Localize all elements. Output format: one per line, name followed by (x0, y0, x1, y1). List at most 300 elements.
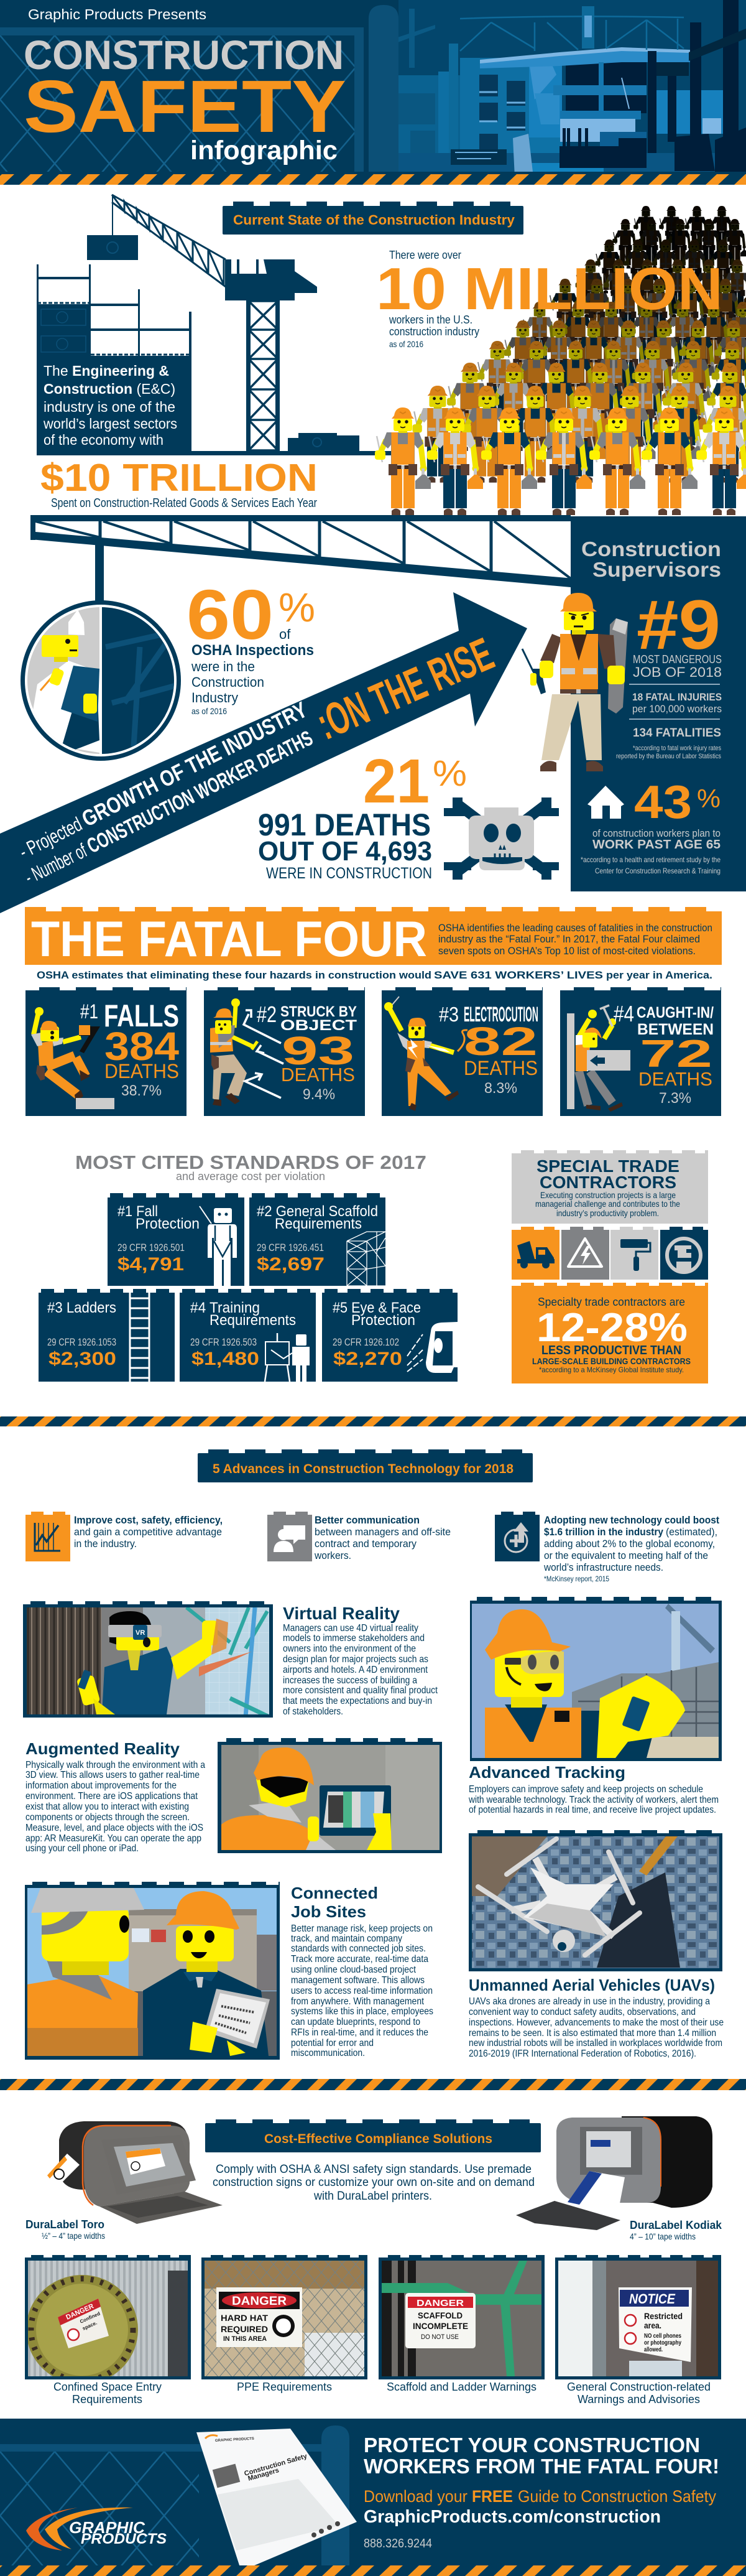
text: fatalities: 134 FATALITIES (633, 727, 721, 740)
stat: 60 percent: of (279, 626, 291, 642)
heading: supervisors: Supervisors (592, 558, 721, 581)
benefit: better communication: workers. (314, 1550, 351, 1561)
text: fatal four description (438, 922, 712, 957)
standard 5: eye protection: $2,270 (333, 1349, 402, 1369)
text: connected job sites: miscommunication. (291, 2048, 365, 2058)
electrocution stats: DEATHS (464, 1057, 538, 1079)
header pre-title: Graphic Products Presents (28, 6, 206, 22)
photo: general warnings: NOTICE (629, 2291, 676, 2307)
stat: ten million workers (376, 249, 723, 349)
text: uavs: convenient way to conduct safety audits, observations, and (469, 2007, 696, 2017)
stat: 21 percent deaths: % (433, 753, 467, 794)
text: engineering and construction: Construction (E&C) (44, 381, 175, 397)
photo: scaffold warnings: INCOMPLETE (413, 2321, 468, 2331)
footer heading: PROTECT YOUR CONSTRUCTION (364, 2434, 700, 2457)
struck stats: STRUCK BY (280, 1003, 357, 1020)
photo: confined space: DANGER (65, 2302, 95, 2322)
standard 1: fall protection: $4,791 (117, 1254, 184, 1275)
photo captions: Requirements (72, 2393, 142, 2406)
arrow text: worker deaths (21, 726, 316, 889)
struck stats: 93 (282, 1028, 354, 1073)
arrow text: worker deaths: - Number of (21, 839, 90, 888)
text: advanced tracking (468, 1763, 719, 1815)
icon: plus and arrow (505, 1522, 528, 1552)
caught stats: BETWEEN (637, 1021, 714, 1038)
caught stats (614, 1001, 714, 1107)
photo: scaffold warnings: DO NOT USE (421, 2333, 459, 2341)
benefit: adopting new technology (495, 1513, 719, 1583)
standard 3: ladders: $2,300 (48, 1349, 116, 1369)
panel: special trade contractors: CONTRACTORS (540, 1173, 676, 1192)
icon: water tap (667, 1239, 701, 1272)
photo: scaffold warnings: DANGER (417, 2298, 464, 2309)
stat: ten million workers: There were over (389, 249, 461, 261)
struck stats: #2 (257, 1002, 277, 1027)
text: save 631 workers: per year in America. (606, 969, 712, 981)
standard 1: fall protection: Protection (136, 1216, 200, 1232)
stat: 43 percent: 43 (634, 776, 692, 828)
footer download line: Guide to Construction Safety (518, 2487, 716, 2506)
text: advanced tracking: Employers can improve safety and keep projects on schedule (469, 1784, 703, 1795)
footer heading: WORKERS FROM THE FATAL FOUR! (364, 2455, 719, 2478)
caught stats: CAUGHT-IN/ (637, 1004, 714, 1021)
text: augmented reality: environment. There are iOS applications that (25, 1791, 198, 1802)
icon: ladder (130, 1293, 149, 1382)
hazard stripe top (0, 172, 746, 185)
standard 1: fall protection (108, 1196, 244, 1286)
crane cab (225, 259, 317, 300)
text: engineering and construction: industry is one of the (44, 399, 175, 415)
text: connected job sites: from anywhere. With management (291, 1996, 424, 2007)
panel: construction supervisors (571, 516, 746, 891)
stat: 43 percent: Center for Construction Research & Training (595, 867, 721, 875)
stat: 21 percent deaths (258, 746, 467, 882)
struck stats: OBJECT (280, 1017, 357, 1034)
supervisor figure (522, 593, 628, 771)
stat: 60 percent (186, 575, 315, 716)
printer: duralabel kodiak (516, 2116, 712, 2230)
text: fatal injuries: per 100,000 workers (632, 703, 722, 715)
text: virtual reality: that meets the expectations and buy-in (283, 1696, 432, 1706)
photo: general warnings: NO cell phones (644, 2333, 681, 2340)
money bricks (41, 309, 86, 352)
rising arrow (0, 592, 527, 913)
banner: compliance solutions: Cost-Effective Compliance Solutions (264, 2132, 492, 2146)
text: comply: construction signs or customize your own on-site and on demand (213, 2176, 535, 2189)
standard 2: scaffold: #2 General Scaffold (257, 1203, 378, 1220)
falls stats: DEATHS (104, 1060, 179, 1082)
panel: special trade contractors: managerial challenge and contributes to the (535, 1199, 680, 1209)
stat: 21 percent deaths: 991 DEATHS (258, 807, 431, 842)
struck stats: 9.4% (303, 1086, 335, 1103)
text: save 631 workers (37, 969, 712, 981)
benefit: adopting new technology: or the equivalent to meeting half of the (544, 1550, 708, 1561)
caption: toro: ½” – 4” tape widths (42, 2231, 105, 2241)
booklet: Construction Safety (244, 2452, 308, 2478)
footnote: labor statistics: *according to fatal work injury rates (633, 745, 721, 752)
standard 4: training (180, 1291, 316, 1382)
photo: ppe requirements: DANGER (232, 2295, 287, 2308)
panel: special trade contractors: Executing construction projects is a large (540, 1190, 676, 1200)
hazard stripe bottom (0, 2565, 746, 2576)
electrocution stats: 82 (464, 1019, 538, 1064)
text: save 631 workers: SAVE 631 WORKERS’ LIVES (434, 969, 603, 981)
icon: skull and crossbones (444, 797, 559, 880)
stat: 60 percent: Construction (191, 674, 264, 690)
standard 4: training: Requirements (210, 1312, 296, 1329)
text: comply: Comply with OSHA & ANSI safety sign standards. Use premade (216, 2163, 532, 2176)
icon: face shield (407, 1322, 458, 1373)
heading: supervisors: Construction (581, 537, 721, 560)
panel: the fatal four (25, 909, 722, 967)
text: connected job sites: management software. This allows (291, 1975, 425, 1986)
text: fatal four description: industry as the “Fatal Four.” In 2017, the Fatal Four claimed (438, 933, 700, 945)
card: caught in between (560, 989, 721, 1116)
icon: trainer and easel (265, 1333, 310, 1382)
electrocution stats: 8.3% (484, 1080, 517, 1097)
text: most dangerous: JOB OF 2018 (633, 664, 722, 680)
photo captions: Confined Space Entry (53, 2381, 162, 2393)
benefit: better communication: between managers and off-site (315, 1526, 451, 1538)
icon: rising chart (35, 1523, 60, 1551)
text: fatal injuries (632, 691, 722, 715)
standard 3: ladders: #3 Ladders (47, 1300, 116, 1316)
photo captions: PPE Requirements (237, 2381, 332, 2393)
stat: 21 percent deaths: 21 (363, 746, 430, 816)
standard 5: eye protection: Protection (351, 1312, 415, 1329)
text: virtual reality: of stakeholders. (283, 1706, 343, 1717)
text: uavs: 2016-2019 (IFR International Federation of Robotics, 2016). (469, 2048, 696, 2059)
stat: 43 percent: of construction workers plan to (592, 827, 721, 839)
booklet: Managers (247, 2467, 280, 2483)
icon: scaffold (347, 1232, 385, 1286)
banner: current state (223, 204, 523, 235)
post (567, 1013, 574, 1109)
photo: ppe requirements (201, 2256, 367, 2379)
benefit: cost safety efficiency (25, 1513, 223, 1561)
text: most dangerous (633, 653, 722, 680)
arrow text: worker deaths: CONSTRUCTION WORKER DEATHS (83, 726, 316, 858)
banner: tech advances (198, 1451, 533, 1482)
text: augmented reality: app: AR MeasureKit. You can operate the app (25, 1833, 201, 1844)
text: augmented reality (25, 1739, 205, 1854)
caption: toro (25, 2218, 105, 2241)
truss beam (30, 515, 571, 602)
text: virtual reality: airports and hotels. A 4D environment (283, 1665, 428, 1675)
falling worker (31, 1007, 100, 1102)
text: save 631 workers: OSHA estimates that eliminating these four hazards in construction would (37, 969, 431, 981)
crane tower (246, 300, 280, 452)
benefit: adopting new technology: *McKinsey report, 2015 (544, 1574, 609, 1583)
heading: most cited standards (75, 1151, 426, 1183)
image: virtual reality: VR (136, 1629, 145, 1637)
text: uavs: UAVs aka drones are already in use in the industry, providing a (469, 1996, 710, 2007)
text: engineering and construction: The Engineering & (44, 363, 169, 379)
falls stats: 38.7% (121, 1082, 162, 1099)
photo captions: General Construction-related (567, 2381, 711, 2393)
text: augmented reality: Physically walk through the environment with a (25, 1760, 205, 1770)
panel: productivity stat: *according to a McKinsey Global Institute study. (539, 1365, 684, 1374)
photo: confined space: space. (81, 2320, 98, 2332)
panel: productivity stat: 12-28% (536, 1304, 688, 1350)
benefit: cost safety efficiency: Improve cost, safety, efficiency, (74, 1514, 223, 1526)
electrocution stats (439, 1003, 538, 1097)
benefit: better communication: contract and temporary (315, 1538, 417, 1550)
banner: compliance solutions (205, 2121, 541, 2152)
panel: special trade contractors: SPECIAL TRADE (536, 1156, 679, 1176)
hazard stripe lower (0, 2079, 746, 2090)
standard 5: eye protection: #5 Eye & Face (333, 1300, 421, 1316)
photo: ppe requirements: REQUIRED (221, 2324, 268, 2334)
heading: most cited standards: and average cost per violation (176, 1170, 325, 1183)
photo: scaffold warnings: SCAFFOLD (418, 2310, 463, 2320)
standard 2: scaffold (249, 1196, 385, 1286)
text: uavs (469, 1976, 724, 2059)
text: virtual reality: owners into the environment of the (283, 1644, 416, 1654)
stat: 43 percent: *according to a health and retirement study by the (581, 855, 721, 864)
benefit: adopting new technology: Adopting new technology could boost (544, 1514, 719, 1526)
panel: productivity stat: LESS PRODUCTIVE THAN (541, 1344, 681, 1357)
photo: confined space: Confined (79, 2310, 101, 2325)
benefit: adopting new technology: adding about 2% to the global economy, (544, 1538, 715, 1550)
logo (26, 2508, 167, 2550)
text: virtual reality: models to immerse stakeholders and (283, 1633, 425, 1644)
text: connected job sites: Connected (291, 1884, 378, 1902)
footer heading (364, 2434, 719, 2478)
photo: ppe requirements: IN THIS AREA (223, 2335, 267, 2343)
caption: spent: Spent on Construction-Related Goods & Services Each Year (51, 496, 317, 510)
image: connected job sites (25, 1884, 280, 2060)
struck stats (257, 1002, 357, 1103)
text: most dangerous: MOST DANGEROUS (633, 653, 722, 666)
arrow text: projected growth: - Projected (16, 812, 86, 863)
caption: kodiak: DuraLabel Kodiak (630, 2219, 722, 2231)
text: connected job sites: potential for error and (291, 2038, 374, 2048)
impact arrows (244, 1010, 283, 1098)
photo: scaffold warnings (379, 2256, 545, 2379)
heading: most cited standards: MOST CITED STANDARDS OF 2017 (75, 1151, 426, 1173)
stat: 21 percent deaths: WERE IN CONSTRUCTION (266, 865, 432, 882)
image: drone (469, 1831, 722, 1971)
text: augmented reality: 3D view. This allows users to gather real-time (25, 1770, 200, 1780)
image: advanced tracking (470, 1599, 722, 1761)
text: augmented reality: information about improvements for the (25, 1780, 177, 1791)
icon: grey brick (76, 1098, 114, 1109)
benefit: better communication (267, 1513, 451, 1561)
caption: kodiak (630, 2219, 722, 2241)
standard 5: eye protection: 29 CFR 1926.102 (333, 1336, 399, 1348)
photo: general warnings: or photography (644, 2340, 681, 2346)
crane boom (112, 195, 226, 287)
text: connected job sites (291, 1884, 433, 2058)
hanging money block (87, 195, 138, 260)
header photo: construction site (398, 0, 746, 177)
standard 3: ladders (39, 1291, 175, 1382)
text: fatal four description: seven spots on OSHA’s Top 10 list of most-cited violations. (438, 945, 696, 957)
text: augmented reality: exist that allow you to interact with existing (25, 1802, 189, 1812)
stat: 60 percent: were in the (191, 659, 255, 674)
text: fatal injuries: 18 FATAL INJURIES (632, 691, 722, 703)
benefit: cost safety efficiency: and gain a competitive advantage (74, 1526, 222, 1538)
title: infographic: infographic (190, 136, 338, 165)
text: augmented reality: Augmented Reality (25, 1739, 180, 1758)
caught stats: 7.3% (659, 1090, 691, 1107)
text: comply (213, 2163, 535, 2203)
benefit: adopting new technology: world’s infrastructure needs. (543, 1561, 663, 1573)
image: virtual reality (23, 1602, 273, 1718)
text: ELECTROCUTION (464, 1003, 538, 1026)
photo: confined space (25, 2256, 191, 2384)
photo captions: Warnings and Advisories (578, 2393, 700, 2406)
standard 4: training: $1,480 (191, 1349, 259, 1369)
standard 1: fall protection: 29 CFR 1926.501 (117, 1242, 185, 1253)
text: fatal four description: OSHA identifies the leading causes of fatalities in the construction (438, 922, 712, 934)
text: advanced tracking: Advanced Tracking (469, 1763, 625, 1782)
footnote: labor statistics (616, 745, 721, 760)
standard 2: scaffold: $2,697 (257, 1254, 325, 1275)
footer download line: FREE (472, 2487, 513, 2506)
money pile (288, 433, 359, 452)
text: connected job sites: RFIs in real-time, and it reduces the (291, 2027, 428, 2038)
standard 5: eye protection (322, 1291, 458, 1382)
text: connected job sites: Job Sites (291, 1902, 366, 1921)
text: virtual reality: increases the success of building a (283, 1675, 417, 1686)
icon: person with speech bubble (274, 1525, 305, 1552)
text: connected job sites: systems like this in place, employees (291, 2006, 433, 2017)
photo: general warnings (555, 2256, 721, 2379)
panel: productivity stat (512, 1284, 708, 1383)
footer download line: Download your (364, 2487, 467, 2506)
text: connected job sites: Track more accurate, real-time data (291, 1954, 428, 1965)
arrow text: on the rise: :ON THE RISE (309, 628, 500, 750)
icon: paint roller (620, 1239, 650, 1271)
falls stats: #1 (80, 1000, 98, 1023)
standard 2: scaffold: 29 CFR 1926.451 (257, 1242, 324, 1253)
electrocuted worker (384, 997, 467, 1111)
stat: 60 percent: % (279, 584, 315, 630)
caption: toro: DuraLabel Toro (25, 2218, 104, 2231)
stat: ten million workers: workers in the U.S. (389, 314, 472, 326)
caught worker (576, 1005, 623, 1112)
icon: harness figure (200, 1206, 237, 1286)
crane and money building (37, 195, 391, 455)
caught stats: 72 (640, 1033, 712, 1076)
standard 1: fall protection: #1 Fall (117, 1203, 158, 1220)
falls stats (80, 998, 179, 1099)
icon: grey block with arrow (587, 1050, 630, 1071)
footer download line (364, 2487, 716, 2506)
stat: 60 percent: OSHA Inspections (191, 642, 314, 659)
text: uavs: Unmanned Aerial Vehicles (UAVs) (469, 1976, 715, 1994)
caught stats: DEATHS (638, 1068, 712, 1090)
panel: productivity stat: Specialty trade contractors are (538, 1296, 685, 1308)
arrow text: projected growth (14, 697, 311, 863)
electrocution stats: #3 (439, 1003, 459, 1026)
footer panel (0, 2419, 746, 2576)
footer phone: 888.326.9244 (364, 2537, 432, 2550)
standard 4: training: 29 CFR 1926.503 (190, 1336, 257, 1348)
stat: 43 percent (581, 776, 721, 875)
text: virtual reality (283, 1604, 438, 1717)
text: augmented reality: using your cell phone or iPad. (25, 1843, 139, 1854)
logo: GRAPHIC (69, 2518, 145, 2537)
heading: fatal four: THE FATAL FOUR (31, 911, 427, 967)
photo: general warnings: allowed. (644, 2346, 663, 2353)
standard 4: training: #4 Training (190, 1300, 260, 1316)
text: engineering and construction: of the economy with (44, 432, 163, 448)
printer: duralabel toro (47, 2121, 223, 2224)
workers crowd (375, 206, 746, 515)
text: augmented reality: Measure, level, and place objects with the iOS (25, 1823, 203, 1833)
stat: 60 percent: 60 (186, 575, 274, 654)
panel: productivity stat: LARGE-SCALE BUILDING CONTRACTORS (532, 1356, 691, 1366)
text: connected job sites: using online cloud-based project (291, 1965, 416, 1975)
text: comply: with DuraLabel printers. (313, 2190, 432, 2203)
panel: special trade contractors: industry’s productivity problem. (556, 1208, 659, 1218)
benefit: cost safety efficiency: in the industry. (74, 1538, 137, 1550)
text: connected job sites: users to access real-time information (291, 1986, 433, 1996)
inspector circle illustration (19, 597, 182, 765)
stat: 43 percent: % (697, 784, 721, 813)
falls stats: 384 (104, 1024, 179, 1069)
photo: general warnings: Restricted (644, 2311, 683, 2321)
banner: tech advances: 5 Advances in Construction Technology for 2018 (213, 1462, 513, 1476)
struck stats: DEATHS (281, 1064, 355, 1086)
footnote: labor statistics: reported by the Bureau of Labor Statistics (616, 753, 721, 760)
image: augmented reality (218, 1740, 442, 1853)
stat: number nine: #9 (637, 586, 721, 664)
text: virtual reality: more consistent and quality final product (283, 1685, 438, 1696)
title: safety: SAFETY (24, 65, 346, 148)
stat: 60 percent: Industry (191, 690, 238, 705)
stat: ten million workers: as of 2016 (389, 339, 423, 349)
photo captions (53, 2381, 711, 2406)
text: engineering and construction (43, 363, 177, 448)
heading: supervisors (581, 537, 721, 581)
stat: ten million workers: 10 MILLION (376, 256, 723, 322)
benefit: adopting new technology: (estimated), (666, 1526, 717, 1538)
card: falls (25, 989, 186, 1116)
card: struck by object (204, 989, 365, 1116)
text: virtual reality: Managers can use 4D virtual reality (283, 1623, 418, 1634)
standard 3: ladders: 29 CFR 1926.1053 (47, 1336, 116, 1348)
stat: 60 percent: as of 2016 (191, 706, 227, 716)
text: virtual reality: design plan for major projects such as (283, 1654, 428, 1665)
trade icons row (512, 1228, 708, 1280)
text: engineering and construction: world’s largest sectors (43, 416, 177, 432)
text: connected job sites: Better manage risk, keep projects on (291, 1923, 433, 1934)
banner: current state: Current State of the Construction Industry (233, 212, 515, 228)
benefit: better communication: Better communication (315, 1514, 420, 1526)
stat: 43 percent: WORK PAST AGE 65 (592, 838, 721, 852)
panel: special trade contractors (512, 1152, 708, 1224)
stat: ten million workers: construction industry (389, 325, 479, 338)
caught stats: #4 (614, 1001, 634, 1026)
text: connected job sites: track, and maintain company (291, 1933, 402, 1944)
icon: electric hazard (568, 1239, 602, 1267)
card: electrocution (382, 989, 543, 1116)
caption: kodiak: 4” – 10” tape widths (630, 2231, 696, 2241)
stat: 21 percent deaths: OUT OF 4,693 (258, 836, 432, 867)
struck worker (210, 998, 257, 1106)
booklet (196, 2429, 357, 2571)
icon: cement truck (517, 1241, 555, 1268)
text: virtual reality: Virtual Reality (283, 1604, 400, 1623)
photo: ppe requirements: HARD HAT (221, 2313, 268, 2323)
benefit: adopting new technology: $1.6 trillion in the industry (544, 1526, 663, 1538)
booklet: GRAPHIC PRODUCTS (215, 2437, 254, 2443)
photo: general warnings: area. (644, 2320, 661, 2330)
